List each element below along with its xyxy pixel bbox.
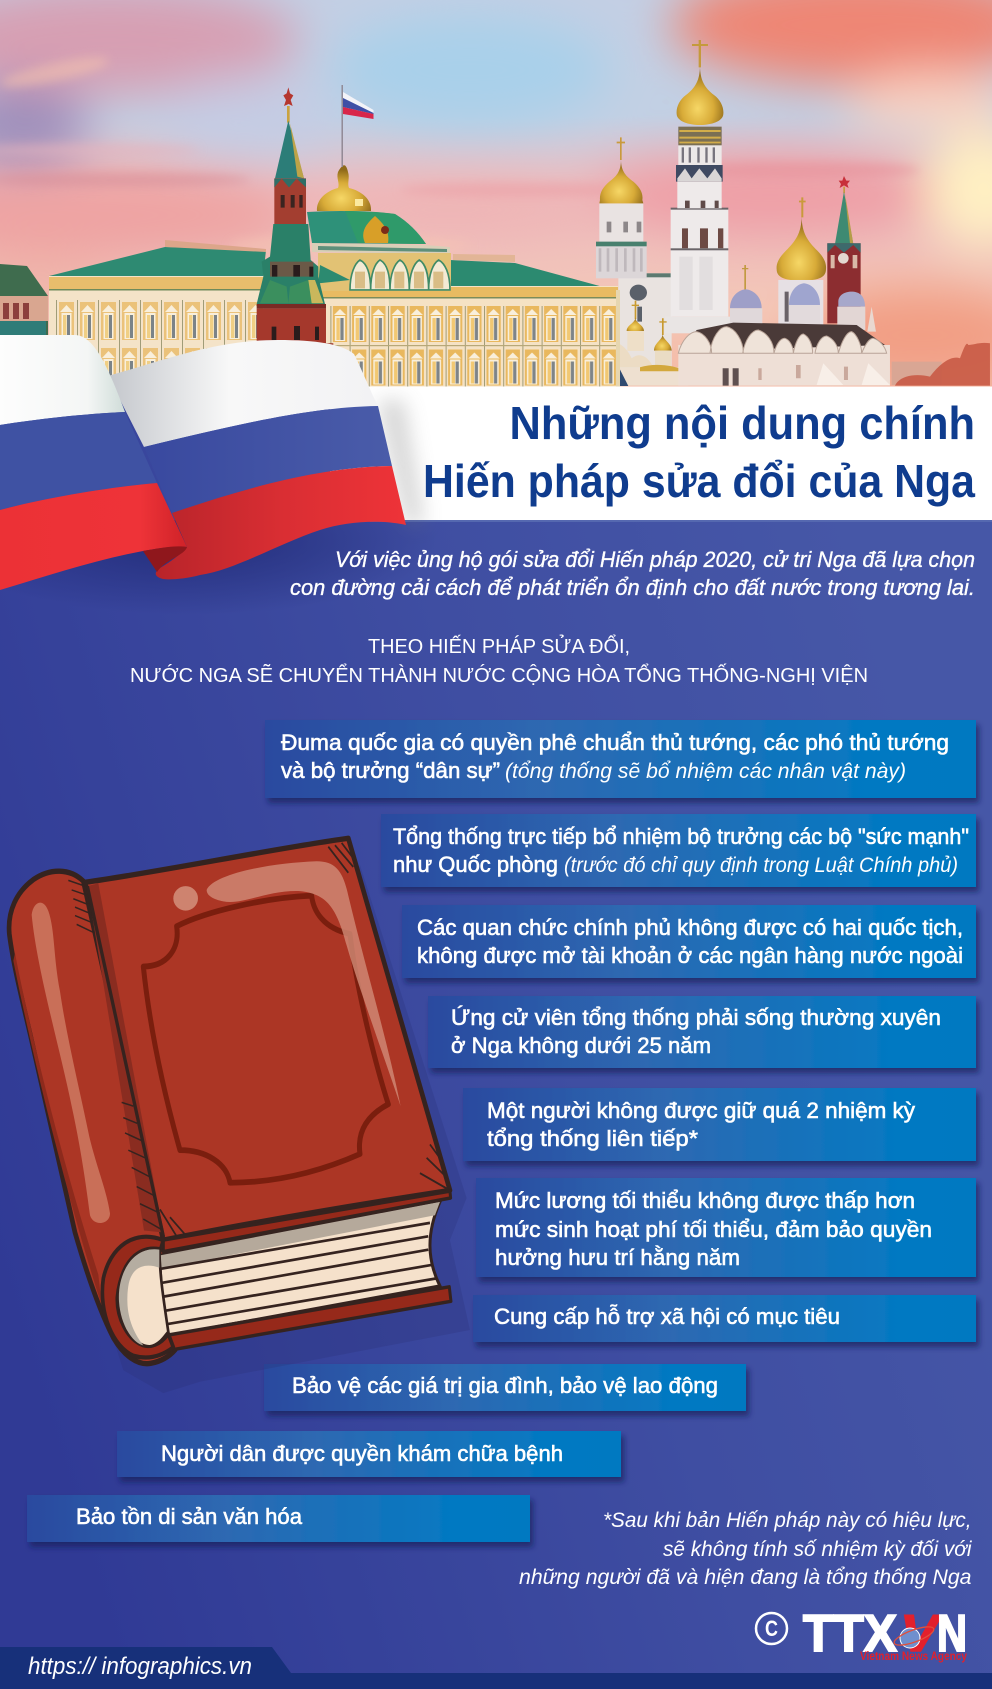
Kremlin red tower	[257, 87, 333, 347]
item bar 5: tổng thống liên tiếp*	[487, 1126, 698, 1151]
title	[423, 397, 975, 507]
item bar 2: như Quốc phòng	[393, 852, 558, 877]
left flag panel	[0, 335, 187, 590]
item bar 8	[264, 1364, 746, 1411]
intro text	[290, 547, 975, 600]
item bar 6: hưởng hưu trí hằng năm	[495, 1245, 740, 1270]
logo: TTXVN: Vietnam News Agency	[860, 1651, 968, 1663]
logo: TTXVN: V	[900, 1605, 943, 1663]
item bar 9: Người dân được quyền khám chữa bệnh	[161, 1441, 563, 1466]
item bar 3: Các quan chức chính phủ không được có hai quốc tịch,	[417, 915, 963, 940]
flag shadow	[0, 400, 480, 620]
book spine	[9, 871, 175, 1364]
intro text: con đường cải cách để phát triển ổn định cho đất nước trong tương lai.	[290, 575, 975, 600]
silver domes	[730, 265, 820, 330]
subheading: NƯỚC NGA SẼ CHUYỂN THÀNH NƯỚC CỘNG HÒA TỔNG THỐNG-NGHỊ VIỆN	[130, 663, 868, 687]
book pages	[160, 1202, 440, 1336]
photo: Kremlin at sunset	[0, 0, 992, 388]
left building	[0, 264, 48, 341]
item bar 1: Đuma quốc gia có quyền phê chuẩn thủ tướng, các phó thủ tướng	[281, 730, 949, 755]
item bar 8: Bảo vệ các giá trị gia đình, bảo vệ lao động	[292, 1373, 718, 1398]
item bar 3: không được mở tài khoản ở các ngân hàng nước ngoài	[417, 943, 963, 968]
item bar 7: Cung cấp hỗ trợ xã hội có mục tiêu	[494, 1304, 840, 1329]
footnote	[519, 1508, 973, 1589]
subheading	[130, 634, 868, 687]
Ivan the Great bell tower	[665, 40, 731, 333]
item bar 5: Một người không được giữ quá 2 nhiệm kỳ	[487, 1098, 916, 1123]
item bar 2: Tổng thống trực tiếp bổ nhiệm bộ trưởng các bộ "sức mạnh"	[393, 824, 969, 849]
item bar 1: và bộ trưởng “dân sự”	[281, 758, 500, 783]
small gold domes	[620, 300, 678, 386]
item bar 6: Mức lương tối thiểu không được thấp hơn	[495, 1188, 915, 1213]
logo: TTXVN	[803, 1605, 968, 1663]
item bar 4: Ứng cử viên tổng thống phải sống thường xuyên	[451, 1005, 941, 1030]
book shadow	[100, 865, 470, 1393]
item bar 1	[265, 720, 976, 798]
icon: copyright mark	[756, 1613, 787, 1644]
item bar 6: mức sinh hoạt phí tối thiểu, đảm bảo quyền	[495, 1217, 932, 1242]
item bar 7	[473, 1295, 976, 1342]
item bar 10: Bảo tồn di sản văn hóa	[76, 1504, 302, 1529]
item bar 10	[27, 1495, 530, 1542]
item bar 2: (trước đó chỉ quy định trong Luật Chính phủ)	[564, 853, 958, 877]
item bar 4: ở Nga không dưới 25 năm	[451, 1033, 711, 1058]
Russian flag banner	[0, 335, 406, 590]
item bar 6	[476, 1178, 976, 1277]
footnote: những người đã và hiện đang là tổng thống Nga	[519, 1565, 972, 1589]
book bottom cover	[163, 1191, 451, 1350]
book spine end	[102, 1237, 173, 1358]
book front cover	[68, 838, 450, 1240]
item bar 4	[428, 996, 976, 1068]
item bar 3	[402, 905, 976, 978]
item bar 1: (tổng thống sẽ bổ nhiệm các nhân vật này)	[505, 759, 906, 783]
logo: TTXVN: N	[937, 1605, 967, 1663]
Grand Kremlin Palace	[49, 85, 620, 388]
item bar 5	[463, 1088, 976, 1161]
red trees and distant wall	[892, 343, 990, 386]
icon: red book	[9, 838, 470, 1393]
logo: TTXVN: TTX	[803, 1605, 897, 1663]
footnote: *Sau khi bản Hiến pháp này có hiệu lực,	[603, 1508, 972, 1532]
Russian flag on the palace	[343, 92, 374, 119]
right gold dome	[777, 197, 826, 327]
cathedral towers and domes	[596, 40, 990, 386]
intro text: Với việc ủng hộ gói sửa đổi Hiến pháp 2020, cử tri Nga đã lựa chọn	[335, 547, 975, 572]
website url: https:// infographics.vn	[28, 1653, 252, 1680]
left bell tower	[596, 137, 672, 385]
icon: copyright mark: C	[765, 1616, 778, 1641]
item bar 2	[381, 814, 976, 887]
Cathedral of the Dormition	[678, 323, 890, 386]
title band	[330, 386, 992, 520]
title: Những nội dung chính	[510, 397, 975, 449]
footer bar	[0, 1647, 992, 1689]
right flag panel	[108, 340, 406, 579]
item bar 9	[117, 1431, 621, 1477]
subheading: THEO HIẾN PHÁP SỬA ĐỔI,	[368, 634, 630, 658]
sky with clouds	[0, 0, 992, 387]
footnote: sẽ không tính số nhiệm kỳ đối với	[663, 1537, 973, 1561]
Spasskaya tower	[827, 176, 876, 332]
